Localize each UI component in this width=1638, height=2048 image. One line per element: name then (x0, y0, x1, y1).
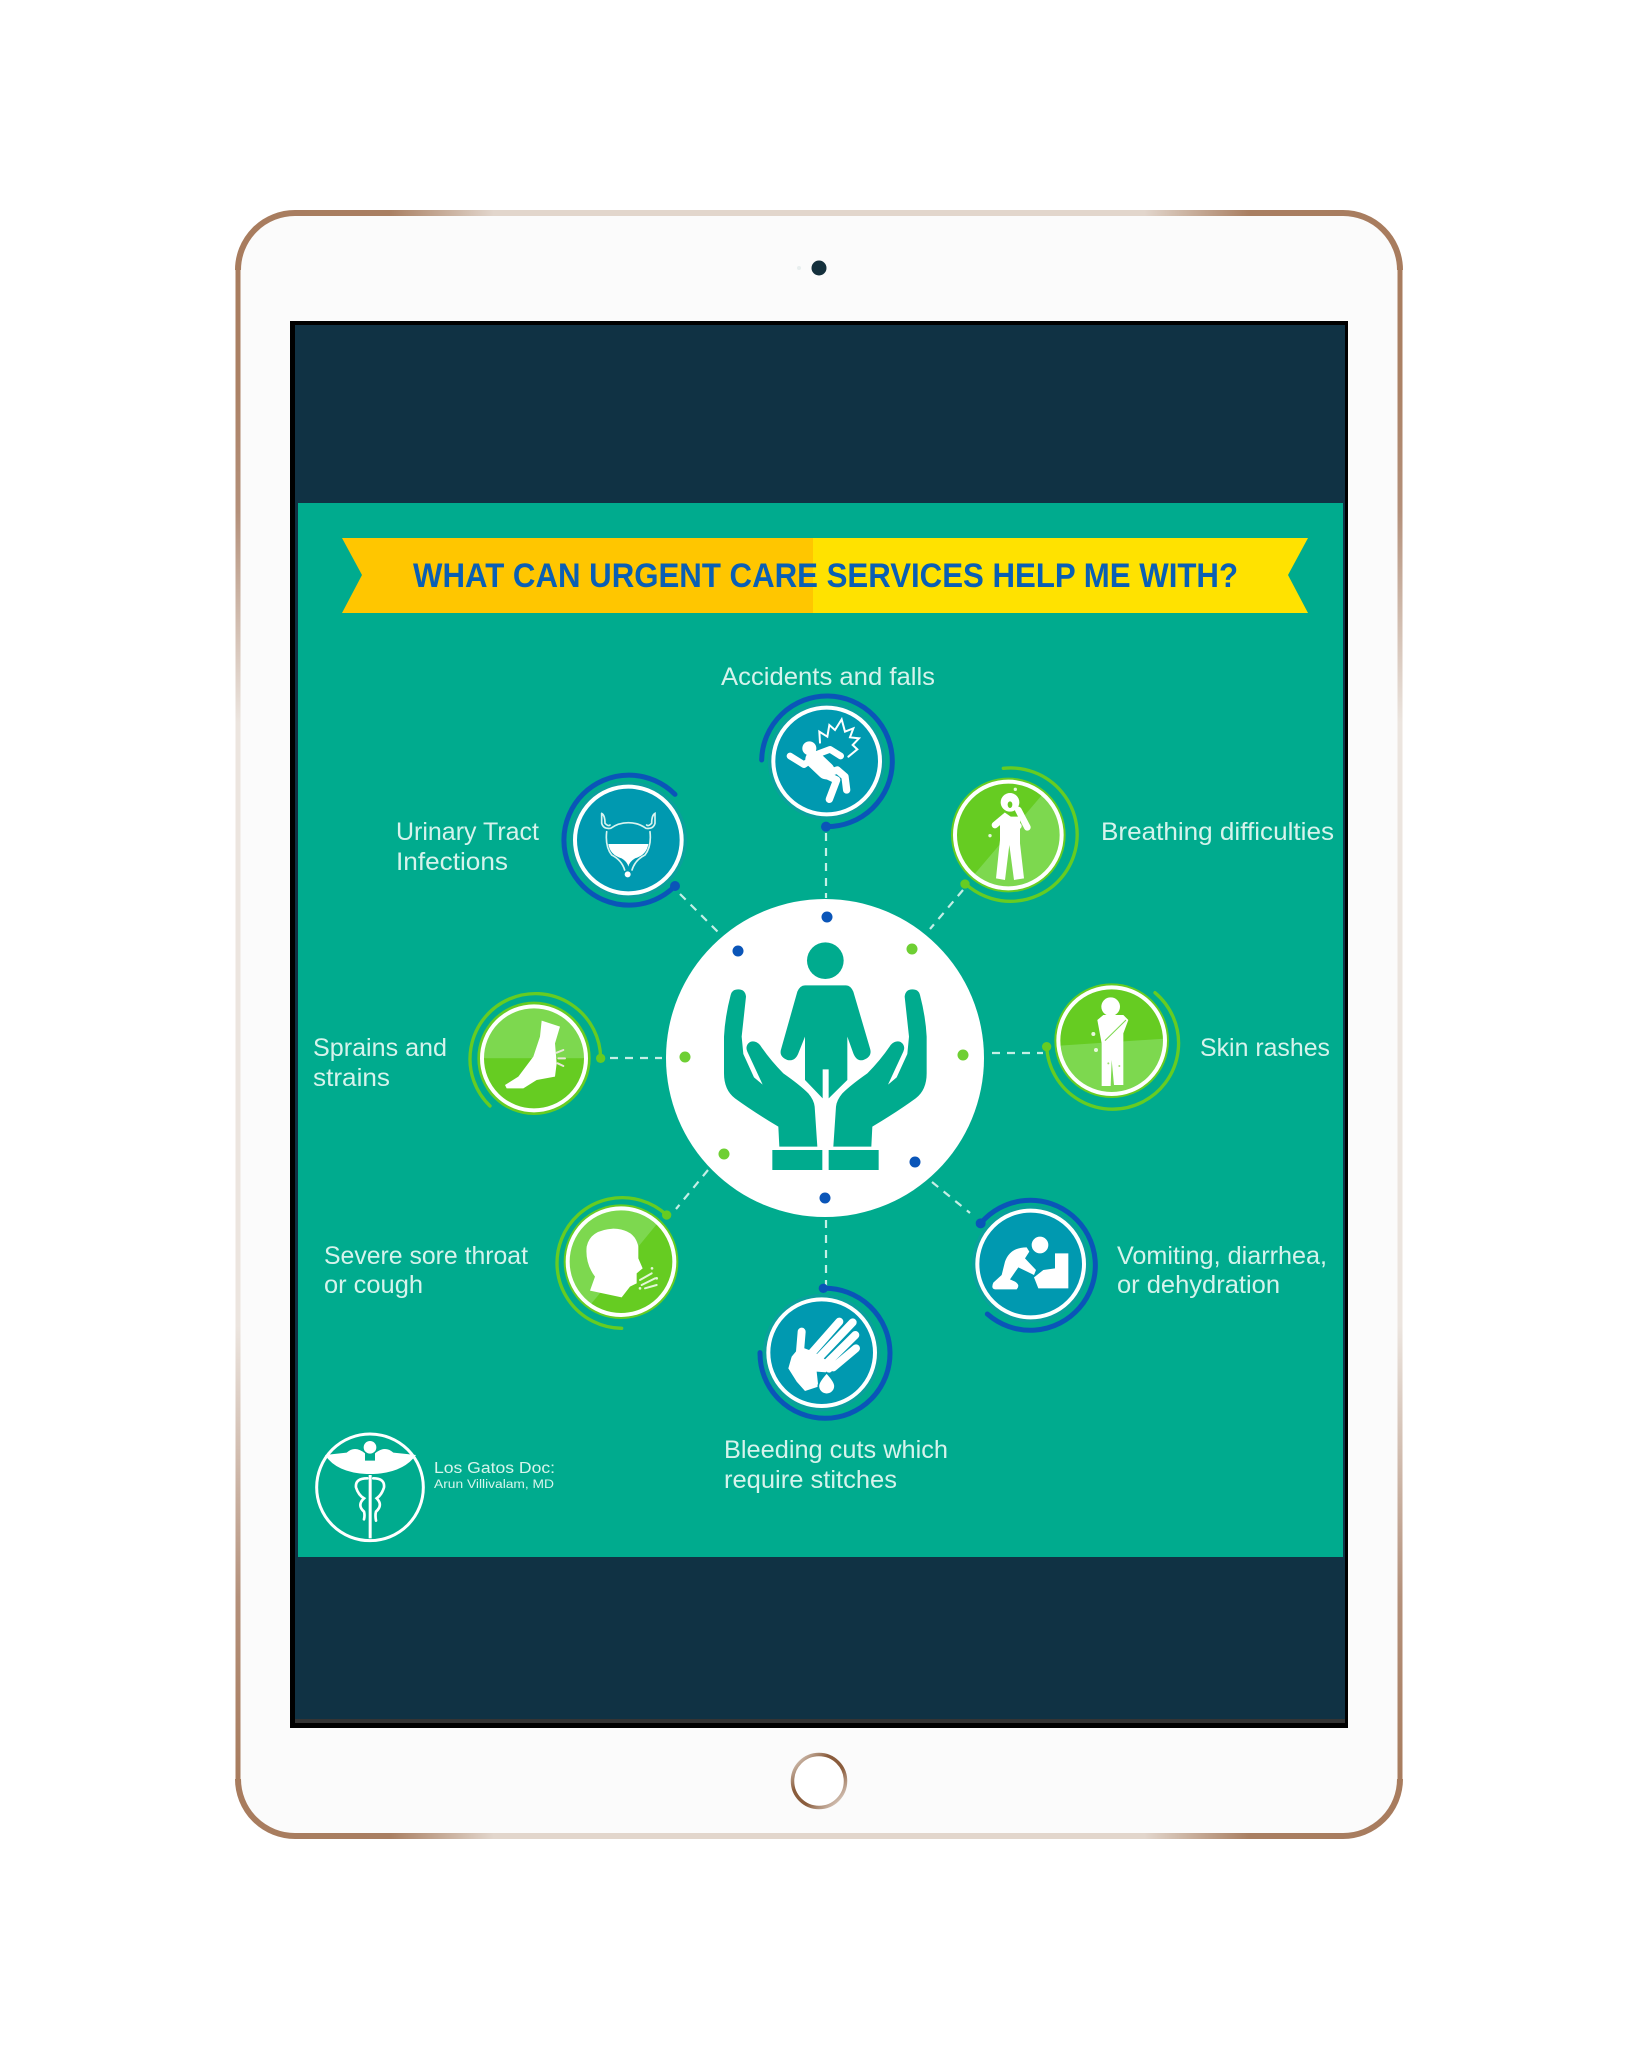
dashed connector lines (610, 833, 1043, 1288)
item: severe sore throat or cough: or cough (324, 1271, 423, 1299)
item: sprains and strains (313, 994, 605, 1118)
item: sprains and strains: Sprains and (313, 1034, 447, 1062)
item: urinary tract infections: Urinary Tract (396, 818, 539, 846)
logo: Los Gatos Doc: Los Gatos Doc: (434, 1460, 555, 1477)
item: vomiting, diarrhea, or dehydration: Vomiting, diarrhea, (1117, 1242, 1327, 1270)
item: skin rashes (1042, 980, 1330, 1109)
logo: Los Gatos Doc: Arun Villivalam, MD (434, 1479, 554, 1491)
title banner (342, 538, 1308, 613)
tablet screen (290, 321, 1348, 1728)
teal infographic panel (298, 503, 1343, 1557)
item: bleeding cuts which require stitches: require stitches (724, 1466, 897, 1494)
item: severe sore throat or cough (324, 1198, 678, 1328)
item: accidents and falls (721, 663, 935, 832)
item: accidents and falls: Accidents and falls (721, 663, 935, 691)
home button (792, 1754, 846, 1808)
item: severe sore throat or cough: Severe sore throat (324, 1242, 528, 1270)
item: sprains and strains: strains (313, 1064, 390, 1092)
item: skin rashes: Skin rashes (1200, 1034, 1330, 1062)
title banner: WHAT CAN URGENT CARE SERVICES HELP ME WITH? (413, 557, 1238, 595)
item: vomiting, diarrhea, or dehydration: or dehydration (1117, 1271, 1280, 1299)
item: urinary tract infections (396, 775, 687, 905)
item: breathing difficulties (951, 768, 1334, 901)
logo: Los Gatos Doc (317, 1434, 555, 1541)
item: breathing difficulties: Breathing difficulties (1101, 818, 1334, 846)
item: vomiting, diarrhea, or dehydration (972, 1200, 1327, 1330)
item: bleeding cuts which require stitches (724, 1284, 948, 1494)
item: bleeding cuts which require stitches: Bleeding cuts which (724, 1436, 948, 1464)
item: urinary tract infections: Infections (396, 848, 508, 876)
tablet frame (238, 213, 1400, 1836)
camera (797, 260, 826, 276)
central circle: hands holding person (666, 899, 984, 1217)
